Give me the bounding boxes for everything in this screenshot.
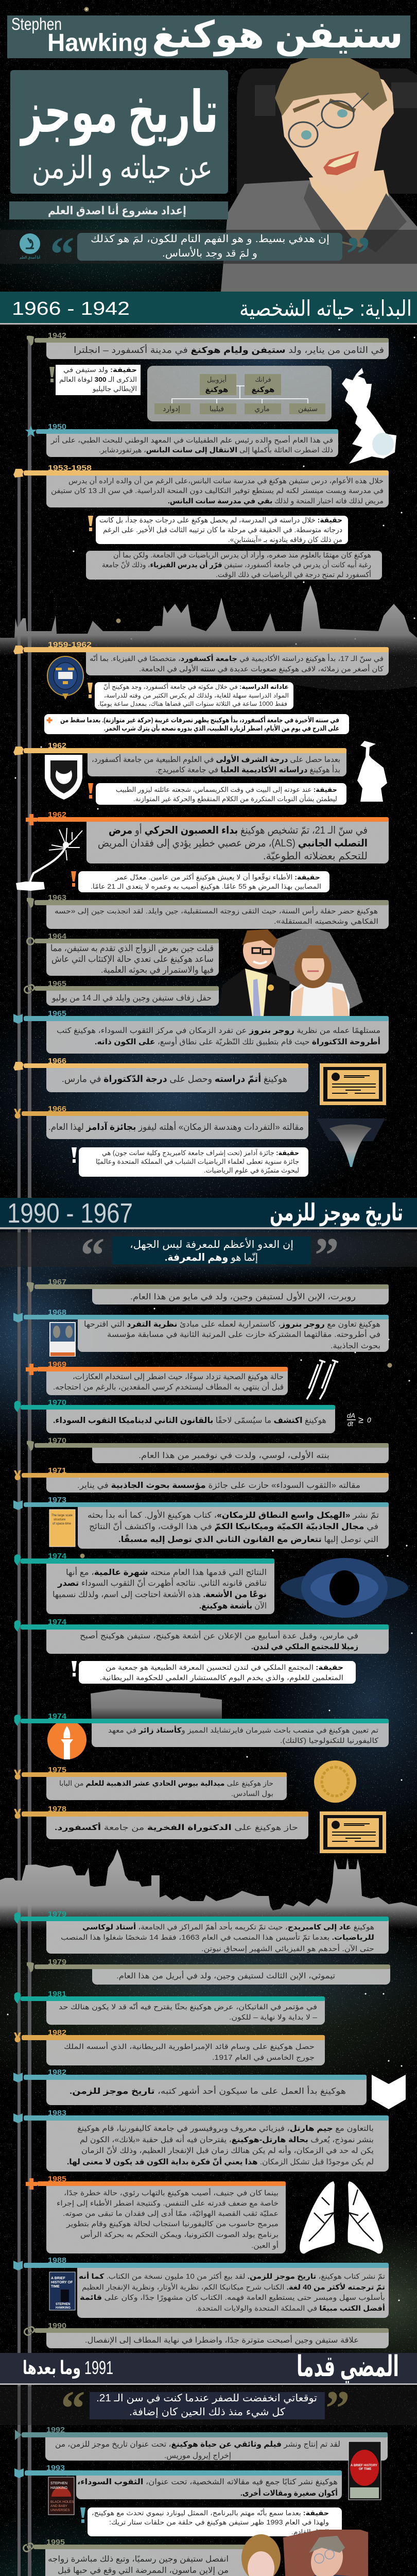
event 1995: انفصل ستيفن وجين رسميًا، وتبع ذلك مباشرة زواجه [48, 2555, 229, 2564]
panel: family tree: ستيفن [298, 404, 318, 413]
event 1970 second law: 1970 [48, 1398, 66, 1407]
event 1982 CBE: جورج الخامس في العام 1917. [212, 2053, 315, 2062]
fact: christmas: حقيقة: عند عودته إلى البيت في وقت الكريسماس، شجعته عائلته ليزور الطبيب [116, 786, 337, 794]
event 1983: لم يكن موجودًا قبل تشكل الزمكان. هذا يعني أنّ فكرة بداية الكون قد يكون لا معنى لها. [67, 2157, 374, 2166]
fact: school grades: درجاته متوسطة. في الحقيقة في مرحلة ما كان ترتيبه الثالث قبل الأخير. على الرغم [103, 525, 342, 534]
event 1966 Adams prize: مقالته «التفردات وهندسة الزمكان» أهلته ليفوز بجائزة آدامز لهذا العام. [48, 1121, 304, 1132]
event 1970 second law [14, 1398, 335, 1433]
panel: family tree [147, 366, 332, 421]
quote band: و لمَ قد وجد بالأساس. [162, 247, 257, 259]
event 1993 [14, 2464, 342, 2499]
portrait of Stephen Hawking [221, 58, 417, 292]
event 1974 radiation [14, 1552, 274, 1614]
event 1965 thesis: مستلهمًا عمله من نظرية روجر بنروز عن تفرد الزمكان في مركز الثقوب السوداء، هوكينغ كتب [57, 1026, 380, 1036]
wedding illustration [218, 926, 363, 1016]
event 1970 Lucy: 1970 [48, 1436, 66, 1445]
event 1979 Timothy: تيموثي، الإبن الثالث لستيفن وجين، ولد في أبريل من هذا العام. [116, 1971, 335, 1981]
book cover: A Brief History of Time: HAWKING [56, 2307, 71, 2310]
fact: Royal Society [72, 1661, 356, 1684]
event 1978 [14, 1805, 308, 1839]
event 1985: برنامج يولد الصوت الكترونيا، ويمكن التحكم به بحركة الرأس [80, 2230, 279, 2239]
quote 2 [0, 1228, 417, 1282]
event 1959-1962: 1959-1962 [48, 640, 92, 649]
section header 2 [0, 1198, 417, 1229]
section header 1 [0, 292, 417, 325]
text block: physics decision: هوكنغ كان مهتمًا بالعلوم منذ صغره، وأراد أن يدرس الرياضيات في الجامعة. ولكن بما أن [113, 550, 371, 560]
event 1981: 1981 [48, 1990, 66, 1998]
event 1974 radiation: الآن بأشعة هوكينغ. [199, 1600, 267, 1611]
panel: family tree: ماري [254, 404, 270, 413]
event 1953-1958: 1953-1958 [48, 464, 92, 472]
Cambridge skyline [0, 1849, 417, 1929]
event 1968: بحوث الجاذبية. [331, 1342, 380, 1350]
event 1983: بالتعاون مع جيم هارتل، فيزيائي معروف وبروفيسور في جامعة كاليفورنيا، قام هوكينغ [77, 2124, 374, 2133]
event 1950: ذلك اضطرت العائلة بأكملها إلى الانتقال إلى سانت البانس، هيرتفوردشاير. [99, 445, 333, 454]
panel: family tree: فرانك [255, 376, 271, 384]
event 1982 CBE: 1982 [48, 2028, 66, 2037]
event 1950 [25, 422, 338, 457]
icon: Caltech seal [47, 1720, 86, 1759]
panel: main headline: تاريخ موجز [20, 80, 218, 146]
event 1983: 1983 [48, 2109, 66, 2117]
event 1988 [13, 2256, 389, 2318]
event 1962 diagnosis: في سنّ الـ 21، تمّ تشخيص هوكينغ بداء العصبون الحركي أو مرض [109, 823, 368, 837]
event 1988: 1988 [48, 2256, 66, 2265]
event 1985 [26, 2175, 286, 2253]
event 1973: التي توصل إليها تتعارض مع القانون الثاني الذي توصل إليه مسبقًا. [118, 1534, 378, 1545]
callout: fall on stairs [44, 714, 349, 734]
event 1988: تمّ ترجمته لأكثر من 40 لغة. الكتاب شرح ميكانيكا الكم، نظرية الأوتار، ونظرية الإنفجار العظيم [82, 2282, 385, 2292]
event 1974 Caltech: تم تعيين هوكينغ في منصب باحث شيرمان فايرتشايلد المميز وكأستاذ زائر في معهد [108, 1725, 378, 1735]
event 1963: 1963 [48, 893, 66, 902]
fact: Star Trek: حقيقة: بعدما سمع بأنّه مهتم بالبرنامج، الممثل ليونارد نيموي تحدث مع هوكينج، [92, 2508, 329, 2517]
icon: white book [372, 2075, 406, 2109]
event 1983: يكن له حد في الزمكان، وأنه لم يكن هنالك زمان قبل الإنفجار العظيم، وذلك لأنّ الزمان [81, 2145, 374, 2156]
event 1974 Caltech: كاليفورنيا للتكنولوجيا (كالتك). [280, 1736, 378, 1745]
icon: black hole [281, 1558, 408, 1618]
event 1975 [14, 1766, 287, 1800]
event 1985: خاصة مع ضعف قدرته على التنفس. وكنتيجة اضطر الأطباء إلى إجراء [57, 2198, 279, 2208]
event 1995 [23, 2538, 251, 2576]
fact: christmas [88, 783, 346, 805]
event 1985: أو العين. [251, 2241, 279, 2250]
event 1974 Royal Society: في مارس، وقبل عدة أسابيع من الإعلان عن أشعة هوكينج، ستيفن هوكينج أصبح [80, 1631, 358, 1641]
event 1988: تمّ نشر كتاب هوكينغ، تاريخ موجز للزمن. لقد بيع أكثر من 10 مليون نسخة من الكتاب. كما أنه [79, 2272, 385, 2281]
fact: Adams prize: لبحوث متميّزة في علوم الرياضيات. [204, 1166, 299, 1175]
panel: family tree: فيليبا [210, 404, 224, 413]
icon: book [13, 1014, 23, 1024]
event 1981: في مؤتمر في الفاتيكان، عرض هوكينغ بحثًا يقترح فيه أنّه قد لا يكون هنالك حد [59, 2002, 317, 2011]
event 1981: – لا بداية ولا نهاية – للكون. [229, 2013, 317, 2022]
event 1982 book start: 1982 [48, 2068, 66, 2077]
couple illustration [226, 2530, 376, 2576]
callout: fall on stairs: على الدرج في يوم من الأيام، اضطر لزيارة الطبيب، الذي بدوره نصحه بأن يترك شرب الخمر. [104, 724, 339, 733]
panel: family tree: هوكنغ [205, 385, 228, 394]
quote 3: توقعاتي انخفضت للصفر عندما كنت في سن الـ 21. [96, 2393, 317, 2404]
event 1974 radiation: نوعًا من الأشعة. هذه الأشعة احتاجت إلى اسم، ولذلك نسميها [53, 1589, 267, 1600]
icon: UK map [342, 368, 396, 464]
event 1963 [27, 893, 389, 929]
book cover: A Brief History of Time: A BRIEF [51, 2277, 65, 2280]
quote marks: ” [346, 227, 371, 281]
event 1966 Adams prize: 1966 [48, 1105, 66, 1113]
icon: Oxford crest [47, 656, 83, 700]
event 1965 wedding [24, 979, 219, 1006]
panel: main headline [10, 70, 228, 194]
event 1967 [27, 1278, 389, 1304]
icon: certificate [320, 1811, 386, 1853]
event 1971: 1971 [48, 1466, 66, 1475]
event 1982 CBE [14, 2028, 325, 2065]
event 1970 second law: هوكينغ اكتشف ما سيُسمّى لاحقًا بالقانون الثاني لديناميكا الثقوب السوداء. [53, 1416, 326, 1426]
book cover: Black Holes and Baby Universes: HAWKING [50, 2486, 67, 2490]
credit band: إعداد مشروع أنا اصدق العلم [48, 202, 186, 217]
event 1973: تمّ نشر «الهيكل واسع النطاق للزمكان»، كتاب هوكينغ الأول. كما أنه بدأ بحثه [88, 1510, 379, 1520]
event 1962 first class: بدأ هوكينغ دراساته الأكاديمية العليا في جامعة كامبريدج. [155, 765, 340, 775]
timeline vertical lines [18, 337, 31, 2576]
formula dA/dt: ≥ [358, 1415, 363, 1425]
event 1985: عمليّة ثقب القصبة الهوائيّة، ممّا أدى إلى فقدان ما تبقى من صوته. [63, 2209, 279, 2218]
event 1968: هوكينغ تعاون مع روجر بنروز، كاستمرارية لعمله على مبادئ نظرية التفرد التي اقترحها [84, 1320, 380, 1329]
fact: Galileo: الإيطالي جاليليو [92, 385, 137, 393]
icon: ring [26, 937, 34, 945]
fact: Royal Society: حقيقة: المجتمع الملكي في لندن لتحسين المعرفة الطبيعية هو جمعية من [106, 1663, 343, 1672]
book cover: A Brief History of Time: HISTORY OF [51, 2281, 73, 2284]
fact: Star Trek: الجيل القادم. [291, 2528, 329, 2536]
book cover: A Brief History of Time: STEPHEN [56, 2303, 70, 2306]
event 1942: 1942 [48, 331, 66, 340]
event 1963: هوكينغ حضر حفلة رأس السنة، حيث التقى زوجته المستقبلية، جين وايلد. لقد انجذبت جين إلى «حسه [55, 906, 378, 916]
event 1971: مقالته «الثقوب السوداء» حازت على جائزة مؤسسة بحوث الجاذبية في يناير. [77, 1481, 360, 1490]
section header 3 [0, 2350, 417, 2385]
event 1983 [13, 2109, 389, 2172]
Caltech building silhouette [91, 1689, 222, 1720]
icon: Cambridge shield [45, 755, 82, 800]
formula dA/dt [347, 1412, 371, 1428]
event 1959-1962 [13, 640, 389, 675]
icon: play [15, 2430, 22, 2440]
event 1973: 1973 [48, 1496, 66, 1504]
book cover: Large Scale Structure [49, 1510, 75, 1547]
quote 3 [0, 2381, 417, 2435]
fact: prognosis [71, 871, 329, 892]
fact: study habits: المواد الدراسية سهلة للغاية، ولذلك لم يكرس الكثير من وقته للدراسة، [104, 692, 289, 700]
event 1942 [27, 331, 389, 359]
logo [20, 233, 40, 260]
event 1981 [14, 1990, 325, 2025]
icon: certificate [320, 1063, 386, 1105]
event 1953-1958: في مدرسة ويست مينستر لكنه لم يستطع توفير التكاليف دون المنحة الدراسية. في سن الـ 13 كان ستيفن [51, 486, 384, 495]
fact: study habits: فقط 1000 ساعة في الثلاثة سنوات التي قضاها هناك، بمعدل ساعة يوميًا. [98, 700, 287, 708]
Oxford skyline [0, 585, 417, 656]
credit band [9, 201, 228, 219]
event 1962 first class: 1962 [48, 741, 66, 750]
event 1982 CBE: حصل هوكينغ على وسام قائد الإمبراطورية البريطانية، الذي أسسه الملك [64, 2042, 315, 2051]
event 1974 Royal Society: زميلا للمجتمع الملكي في لندن. [251, 1642, 358, 1651]
icon: crutches [307, 1360, 338, 1399]
quote marks [50, 227, 371, 281]
section header 1: 1966 - 1942 [12, 298, 130, 319]
title Stephen: Stephen [11, 14, 62, 33]
event 1959-1962: في سنّ الـ 17، بدأ هوكينغ دراسته الأكاديمية في جامعة أكسفورد، متخصصًا في الفيزياء. بما أنّه [90, 654, 384, 663]
icon: graduate silhouette [357, 741, 387, 802]
film poster: OF TIME [359, 2468, 371, 2471]
book cover: Black Holes and Baby Universes: UNIVERSES [50, 2509, 70, 2512]
event 1969: قبل أن ينتهي به المطاف ليستخدم كرسي المقعدين، بالرغم من احتجاجه. [53, 1382, 284, 1392]
event 1965 wedding: حفل زفاف ستيفن وجين وايلد في الـ 14 من يوليو [51, 994, 212, 1003]
icon: neuron [16, 828, 82, 891]
event 1969: 1969 [48, 1360, 66, 1369]
event 1974 radiation: تناقض قانونه الثاني. نتائجه أظهرت أنّ الثقوب السوداء تصدر [57, 1578, 267, 1588]
event 1953-1958 [13, 464, 389, 507]
quote 3: “ [61, 2381, 85, 2435]
icon: gold medal [314, 1760, 356, 1803]
quote 2: “ [80, 1228, 105, 1282]
icon: rings [24, 984, 35, 994]
event 1964: 1964 [48, 932, 67, 941]
fact: Galileo: الذكرى الـ 300 لوفاة العالم [59, 376, 137, 384]
event 1953-1958: مريض لذلك فاته اختبار المنحة و لذلك بقي في مدرسة سانت البانس. [168, 497, 384, 505]
fact: prognosis: حقيقة: الأطباء توقّعوا أن لا يعيش هوكينغ أكثر من عامين. معدّل عمر [115, 873, 320, 882]
icon: blob [13, 469, 24, 478]
event 1970 Lucy: بنته الأولى، لوسي، ولدت في نوفمبر من هذا العام. [138, 1450, 329, 1461]
icon: drop [14, 1401, 21, 1412]
event 1993: أكوان صغيرة ومقالات أخرى. [240, 2488, 338, 2498]
fact: Galileo: حقيقة: ولد ستيفن في [63, 366, 137, 374]
panel: family tree: هوكنغ [252, 385, 274, 394]
event 1979 Timothy [27, 1958, 390, 1985]
event 1950: 1950 [48, 422, 66, 431]
event 1964: ساعد هوكينغ على تعدي حالة الإكتئاب التي عاش [51, 954, 214, 964]
event 1964: فيها والاستمرار في بحوثه العلمية. [101, 965, 214, 975]
event 1950: في هذا العام أصبح والده رئيس علم الطفيليات في المعهد الوطني للبحث الطبي، على أثر [50, 435, 333, 445]
event 1974 Caltech: 1974 [48, 1712, 67, 1721]
event 1979 Lucasian [14, 1910, 389, 1954]
fact: school grades: من ذلك كان رفاقه ينادونه بـ «آينشتاين». [228, 535, 342, 544]
event 1968: 1968 [48, 1308, 66, 1317]
event 1970 Lucy [27, 1436, 389, 1463]
formula dA/dt: dt [348, 1420, 354, 1428]
event 1979 Lucasian: حتى الآن. أحدهم هو الفيزيائي الشهير إسحاق نيوتن. [201, 1944, 374, 1953]
icon: pin [27, 336, 34, 346]
quote marks: “ [50, 227, 74, 281]
text block: physics decision: رغبة أبيه كانت أن يدرس في جامعة أكسفورد، ستيفن قرّر أن يدرس الفيزياء، وذلك لأنّ جامعة [102, 560, 371, 569]
event 1982 book start: هوكينغ بدأ العمل على ما سيكون أحد أشهر كتبه، تاريخ موجز للزمن. [70, 2086, 346, 2096]
event 1975: 1975 [48, 1766, 66, 1774]
event 1969 [26, 1360, 288, 1395]
fact: Adams prize [72, 1147, 308, 1177]
book cover: Black Holes and Baby Universes [48, 2477, 74, 2515]
event 1962 diagnosis: 1962 [48, 810, 66, 819]
quote band [0, 227, 417, 281]
fact: study habits [88, 682, 293, 709]
icon: wormhole funnel [317, 1118, 385, 1167]
event 1990: 1990 [48, 2321, 66, 2330]
event 1983: بنشر نموذج، يُعرف بحالة هارتل-هوكينغ، يقترحان فيه أنه قبل حقبة «بلانك»، الكون لم [80, 2134, 374, 2145]
quote 3: ” [325, 2381, 350, 2435]
event 1966 doctorate: 1966 [48, 1057, 66, 1065]
icon: medal [14, 1109, 21, 1118]
fact: Adams prize: جائزة سنوية تعطى لعلماء الرياضيات الشباب في المملكة المتحدة وعالميًا [96, 1158, 299, 1166]
event 1995: من إلاين ماسون، الممرضة التي وقع في حبها قبل [58, 2566, 229, 2575]
fact: christmas: ليطمئن بشأن النوبات المتكررة من الكلام المتقطع والحركة غير المتوازنة. [133, 794, 337, 803]
event 1974 Caltech [14, 1712, 389, 1747]
event 1979 Timothy: 1979 [48, 1958, 66, 1967]
event 1992 [15, 2426, 388, 2461]
event 1995: 1995 [46, 2538, 65, 2547]
fact: school grades [88, 515, 348, 544]
event 1985: مبرمج حاسوب من كاليفورنيا استجاب لحالة هوكينغ وقام بتطوير [66, 2219, 279, 2228]
event 1978: 1978 [48, 1805, 66, 1814]
event 1971 [14, 1466, 389, 1493]
panel: family tree: أيزوبيل [207, 375, 227, 384]
fact: Royal Society: المتعلمين للعلوم، والذي يخدم اليوم كالمستشار العلمي للحكومة البريطانية. [100, 1673, 343, 1682]
fact: Star Trek [80, 2507, 342, 2536]
event 1962 diagnosis: للتحكم بعضلاته الطوعيّة. [263, 851, 368, 862]
formula dA/dt: 0 [367, 1416, 371, 1424]
book cover: Nature of Space and Time [49, 1322, 76, 1357]
icon: star [25, 426, 37, 437]
fact: study habits: عاداته الدراسية: في خلال مكوثه في جامعة أكسفورد، وجد هوكينج أنّ [103, 683, 289, 691]
book cover: Large Scale Structure: of space-time [53, 1522, 72, 1526]
title band [7, 14, 410, 58]
event 1968: في أطروحته. مقالتهما المشتركة حازت على المرتبة الثانية في مسابقة مؤسسة [107, 1329, 380, 1340]
event 1962 first class [13, 741, 346, 776]
film poster: A BRIEF HISTORY [351, 2464, 377, 2467]
event 1967: 1967 [48, 1278, 66, 1286]
event 1953-1958: خلال هذه الأعوام، درس ستيفن هوكنغ في مدرسة سانت البانس،على الرغم من أن والده اراده أن يدرس [68, 476, 384, 485]
fact: Adams prize: حقيقة: جائزة آدامز (تحت إشراف جامعة كامبريدج وكلية سانت جون) هي [102, 1148, 299, 1157]
quote 2: إن العدو الأعظم للمعرفة ليس الجهل، [130, 1238, 293, 1251]
event 1988: بأسلوب سهل وميسر حتى يستطيع العامة فهمه. الكتاب كان مشهورًا جدًا، وكان على قائمة [80, 2292, 385, 2302]
event 1975: حاز هوكينغ على ميدالية بيوس الحادي عشر الذهبية للعلم من البابا [59, 1779, 273, 1788]
event 1978: حاز هوكينغ على الدكتوراة الفخرية من جامعة أكسفورد. [55, 1822, 298, 1832]
text block: physics decision: أكسفورد لم تمنح درجة في الرياضيات في ذلك الوقت. [216, 570, 371, 579]
text block: physics decision [86, 550, 382, 580]
event 1966 doctorate: هوكينغ أتمّ دراسته وحصل على درجة الدّكتوراة في مارس. [62, 1073, 287, 1084]
event 1979 Lucasian: للرياضيات. بعدما تمّ تأسيس هذا المنصب في العام 1663، فقط 14 شخصًا شغلوا هذا المنصب [61, 1932, 374, 1942]
event 1979 Lucasian: هوكينغ عاد إلى كامبريدج، حيث تمّ تكريمه بأحد أهمّ المراكز في الجامعة، أستاذ لوكاسي [82, 1922, 374, 1931]
event 1973: في مجال الجاذبيّة الكميّة وميكانيكا الكمّ في هذا الوقت، واكتشف أنّ النتائج [89, 1521, 378, 1532]
formula dA/dt: dA [347, 1412, 355, 1419]
event 1967: روبرت، الإبن الأول لستيفن وجين، ولد في مايو من هذا العام. [130, 1291, 356, 1302]
event 1993: 1993 [46, 2464, 65, 2472]
event 1962 first class: بعدما حصل على درجة الشرف الأولى في العلوم الطبيعية من جامعة أكسفورد، [92, 754, 340, 765]
event 1992: 1992 [46, 2426, 65, 2434]
book cover: Black Holes and Baby Universes: STEPHEN [50, 2482, 67, 2485]
icon: exclamation [49, 367, 55, 382]
event 1964: قبلت جين بعرض الزواج الذي تقدم به ستيفن، مما [50, 943, 214, 954]
quote 3: كل شيء منذ ذلك الحين كان إضافة. [129, 2406, 285, 2418]
event 1985: 1985 [48, 2175, 66, 2183]
callout: fall on stairs: في سنته الأخيرة في جامعة أكسفورد، بدأ هوكينج يظهر تصرفات غريبة (حركة غير متوازنة). بعدما سقط من [60, 716, 339, 724]
event 1973 [13, 1496, 389, 1549]
event 1963: الفكاهي وشخصيته المستقلة». [274, 917, 378, 926]
book cover: A Brief History of Time: TIME [51, 2285, 60, 2289]
event 1959-1962: كان أصغر من زملائه، لاقى هوكينغ صعوبات عديدة في سنته الأولى في الجامعة. [139, 664, 384, 673]
event 1988: أفضل الكتب مبيعًا في المملكة المتحدة والولايات المتحدة. [196, 2303, 385, 2313]
event 1965 thesis [13, 1009, 389, 1054]
fact: school grades: حقيقة: خلال دراسته في المدرسة، لم يحصل هوكنغ على درجات جيدة جداً، بل كانت [99, 515, 342, 524]
event 1966 Adams prize [14, 1105, 308, 1139]
icon: plus [26, 814, 37, 825]
event 1962 diagnosis [26, 810, 389, 863]
event 1975: بول السادس. [231, 1789, 273, 1798]
event 1968 [13, 1308, 389, 1352]
event 1962 diagnosis: التصلب الجانبي (ALS)، مرض عصبي خطير يؤدي إلى فقدان المريض [98, 838, 368, 850]
quote 2: إنّما هو وهم المعرفة. [165, 1252, 258, 1264]
event 1964 [26, 932, 219, 976]
quote 2: ” [315, 1228, 339, 1282]
event 1942: في الثامن من يناير، ولد ستيفن وليام هوكنغ في مدينة أكسفورد – انجلترا [74, 344, 384, 355]
quote band: إن هدفي بسيط. و هو الفهم التام للكون، لمَ هو كذلك [91, 233, 329, 245]
icon: lungs [300, 2181, 383, 2253]
event 1974 Royal Society [14, 1618, 389, 1654]
book cover: A Brief History of Time [49, 2272, 75, 2310]
event 1974 radiation: 1974 [48, 1552, 67, 1561]
section header 3: 1991 وما بعدها [23, 2357, 113, 2379]
event 1979 Lucasian: 1979 [48, 1910, 66, 1919]
fact: Star Trek: ولهذا في العام 1993 ظهر ستيفن هوكينغ في حلقة من حلقات ستار تريك: [109, 2518, 329, 2527]
fact: Galileo [49, 365, 141, 395]
event 1985: بينما كان في جنيف، أصيب هوكينغ بالتهاب رئوي، حالة خطرة جدًا، [64, 2188, 279, 2197]
event 1969: حالة هوكينغ الصحية تزداد سوءًا، حيث اضطر إلى استخدام العكازات، [73, 1372, 284, 1381]
panel: family tree: إدوارد [163, 404, 180, 413]
book cover: Large Scale Structure: The large scale [51, 1514, 73, 1517]
event 1965 thesis: أطروحة الدّكتوراة حيث قام بتطبيق تلك النّظريّة على نطاق أوسع، على الكون ذاته. [95, 1037, 380, 1046]
event 1993: هوكينغ نشر كتابًا جمع فيه مقالاته الشخصية، تحت عنوان، الثقوب السوداء، [77, 2478, 338, 2486]
title arabic: ستيفن هوكنغ [152, 14, 403, 57]
event 1992: إخراج إيرول موريس. [164, 2451, 231, 2461]
event 1965 wedding: 1965 [48, 979, 66, 988]
book cover: Black Holes and Baby Universes: AND BABY [50, 2504, 68, 2508]
fact: prognosis: المصابين بهذا المرض هو 55 عامًا. هوكينغ أصيب به وعمره لا يتعدى الـ 21 عامًا. [91, 882, 321, 891]
event 1974 Royal Society: 1974 [48, 1618, 67, 1626]
event 1990 [24, 2321, 389, 2348]
book cover: Black Holes and Baby Universes: BLACK HOLES [50, 2500, 74, 2504]
event 1974 radiation: النتائج التي قدمها هذا العام منحته شهرة عالمية، مع أنها [66, 1567, 267, 1578]
title Hawking: Hawking [47, 29, 148, 57]
logo: أنا أصدق العلم [20, 255, 40, 260]
event 1966 doctorate [13, 1057, 308, 1092]
event 1965 thesis: 1965 [48, 1009, 66, 1018]
event 1992: لقد تم إنتاج ونشر فيلم وثائقي عن حياة هوكينغ، تحت عنوان تاريخ موجز للزمن، من [55, 2440, 340, 2449]
book cover: Large Scale Structure: structure [54, 1518, 66, 1521]
section header 2: 1990 - 1967 [7, 1198, 133, 1229]
event 1982 book start [13, 2068, 367, 2105]
film poster [349, 2442, 381, 2500]
panel: main headline: عن حياته و الزمن [32, 150, 213, 186]
event 1990: علاقة ستيفن وجين أصبحت متوترة جدًا، واضطرا في نهاية المطاف إلى الإنفصال. [85, 2335, 359, 2345]
